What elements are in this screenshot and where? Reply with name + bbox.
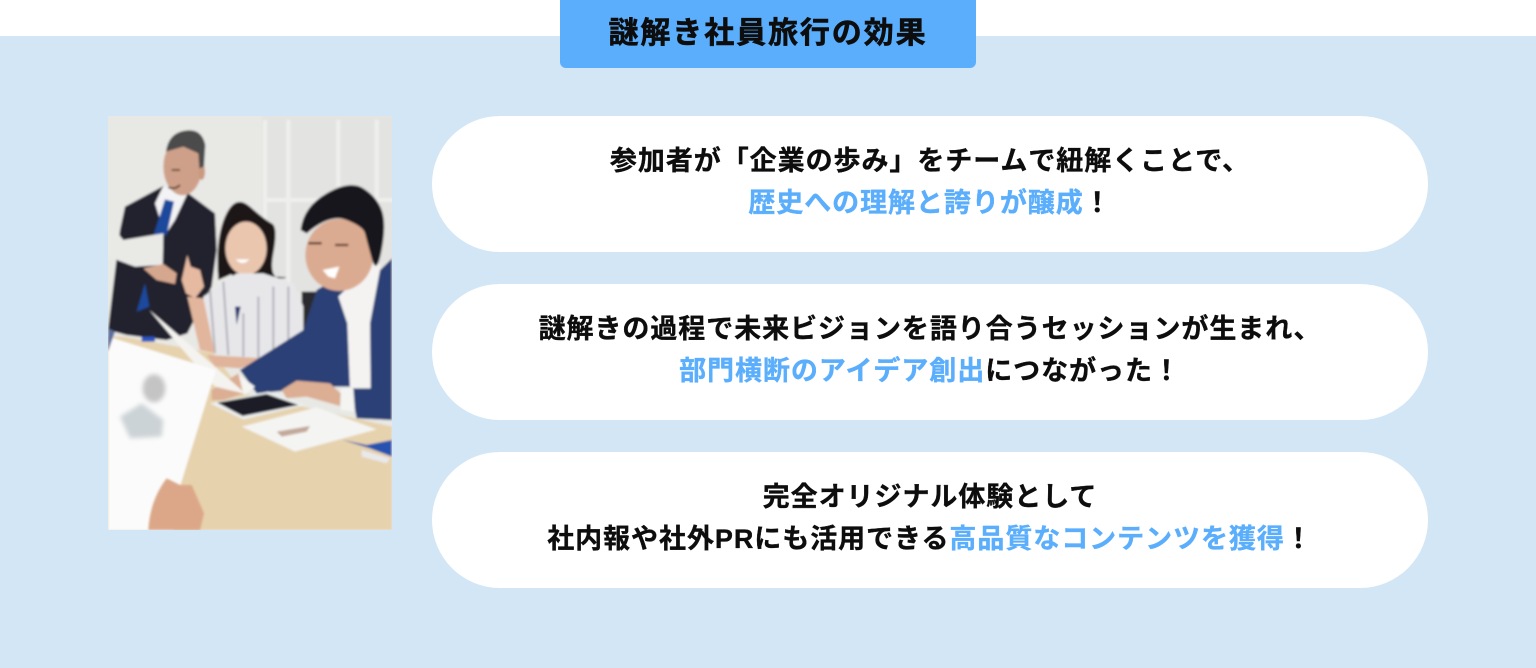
sheet on table — [242, 407, 377, 452]
title — [560, 0, 976, 68]
panel: effect 1 — [432, 116, 1428, 252]
text: effect 3: 社内報や社外PRにも活用できる高品質なコンテンツを獲得！ — [547, 524, 1313, 554]
text: effect 1: 歴史への理解と誇りが醸成！ — [748, 188, 1112, 218]
panel: effect 2 — [432, 284, 1428, 420]
title: 謎解き社員旅行の効果 — [608, 17, 928, 50]
text: effect 3: 完全オリジナル体験として — [763, 482, 1097, 512]
raised sheet — [149, 310, 246, 394]
text: effect 2: 部門横断のアイデア創出につながった！ — [679, 356, 1181, 386]
woman — [218, 202, 286, 280]
text: effect 1 — [610, 146, 1250, 218]
lanyard — [343, 440, 392, 457]
foreground sheet — [108, 337, 216, 530]
text: effect 2 — [539, 314, 1321, 386]
older man suit — [108, 186, 217, 340]
panel: effect 3 — [432, 452, 1428, 588]
table — [100, 337, 392, 530]
tablet — [210, 392, 306, 419]
photo: business team reviewing documents — [108, 116, 392, 530]
younger man jacket — [240, 258, 392, 420]
text: effect 1: 参加者が「企業の歩み」をチームで紐解くことで、 — [610, 146, 1250, 176]
text: effect 3 — [547, 482, 1313, 554]
text: effect 2: 謎解きの過程で未来ビジョンを語り合うセッションが生まれ、 — [539, 314, 1321, 344]
